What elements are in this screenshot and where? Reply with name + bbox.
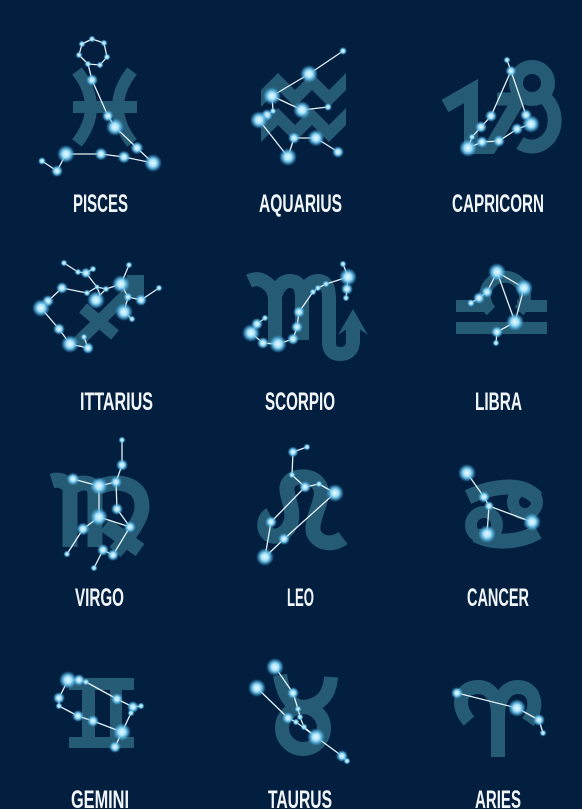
- constellation lines: Scorpio: [251, 264, 348, 344]
- icon: Aries glyph: [461, 687, 534, 757]
- constellation lines: Libra: [471, 272, 524, 343]
- icon: Gemini glyph: [69, 678, 134, 748]
- constellation lines: Cancer: [467, 473, 532, 534]
- constellation stars: Pisces: [38, 36, 162, 177]
- icon: Virgo glyph: [52, 480, 142, 552]
- constellation stars: Leo: [256, 444, 344, 566]
- label: Aquarius: AQUARIUS: [259, 190, 342, 218]
- panel: Leo: [256, 444, 344, 612]
- icon: Libra glyph: [456, 277, 547, 334]
- icon: Sagittarius arrowhead: [125, 275, 144, 305]
- constellation lines: Leo: [265, 447, 335, 557]
- label: Virgo: VIRGO: [75, 584, 124, 612]
- panel: Aquarius: [250, 47, 347, 218]
- icon: Pisces glyph: [73, 71, 137, 143]
- icon: Leo glyph: [265, 477, 343, 543]
- panel: Libra: [456, 263, 547, 416]
- constellation stars: Libra: [467, 263, 533, 346]
- constellation stars: Capricorn: [459, 56, 540, 157]
- constellation stars: Virgo: [64, 436, 136, 572]
- constellation lines: Taurus: [257, 667, 347, 761]
- icon: Cancer glyph: [468, 487, 538, 541]
- icon: Scorpio arrowhead: [338, 309, 368, 335]
- constellation lines: Sagittarius: [41, 263, 159, 348]
- panel: Scorpio: [242, 260, 368, 416]
- icon: Sagittarius glyph: [77, 287, 134, 343]
- constellation stars: Gemini: [53, 671, 144, 753]
- panel: Pisces: [38, 36, 162, 218]
- constellation stars: Taurus: [248, 658, 350, 764]
- constellation lines: Aries: [457, 693, 543, 733]
- constellation lines: Gemini: [59, 680, 141, 747]
- icon: Capricorn glyph: [445, 67, 555, 150]
- panel: Sagittarius: [32, 260, 162, 416]
- constellation lines: Virgo: [67, 440, 130, 568]
- label: Ittarius: ITTARIUS: [80, 388, 153, 416]
- constellation stars: Aries: [451, 687, 546, 736]
- constellation lines: Capricorn: [468, 60, 531, 148]
- panel: Cancer: [458, 464, 541, 612]
- panel: Gemini: [53, 671, 144, 809]
- panel: Virgo: [52, 436, 142, 612]
- constellation stars: Scorpio: [242, 260, 357, 353]
- constellation lines: Pisces: [42, 39, 153, 171]
- icon: Aquarius glyph: [261, 73, 346, 142]
- icon: Taurus glyph: [280, 675, 331, 749]
- panel: Taurus: [248, 658, 350, 809]
- constellation lines: Aquarius: [259, 51, 343, 157]
- constellation stars: Cancer: [458, 464, 541, 543]
- label: Cancer: CANCER: [467, 584, 529, 612]
- panel: Aries: [451, 687, 546, 809]
- constellation stars: Sagittarius: [32, 260, 162, 354]
- label: Scorpio: SCORPIO: [265, 388, 335, 416]
- label: Pisces: PISCES: [73, 190, 128, 218]
- label: Leo: LEO: [287, 584, 314, 612]
- panel: Capricorn: [445, 56, 555, 218]
- constellation stars: Aquarius: [250, 47, 347, 166]
- icon: Scorpio glyph: [249, 279, 353, 354]
- label: Libra: LIBRA: [475, 388, 522, 416]
